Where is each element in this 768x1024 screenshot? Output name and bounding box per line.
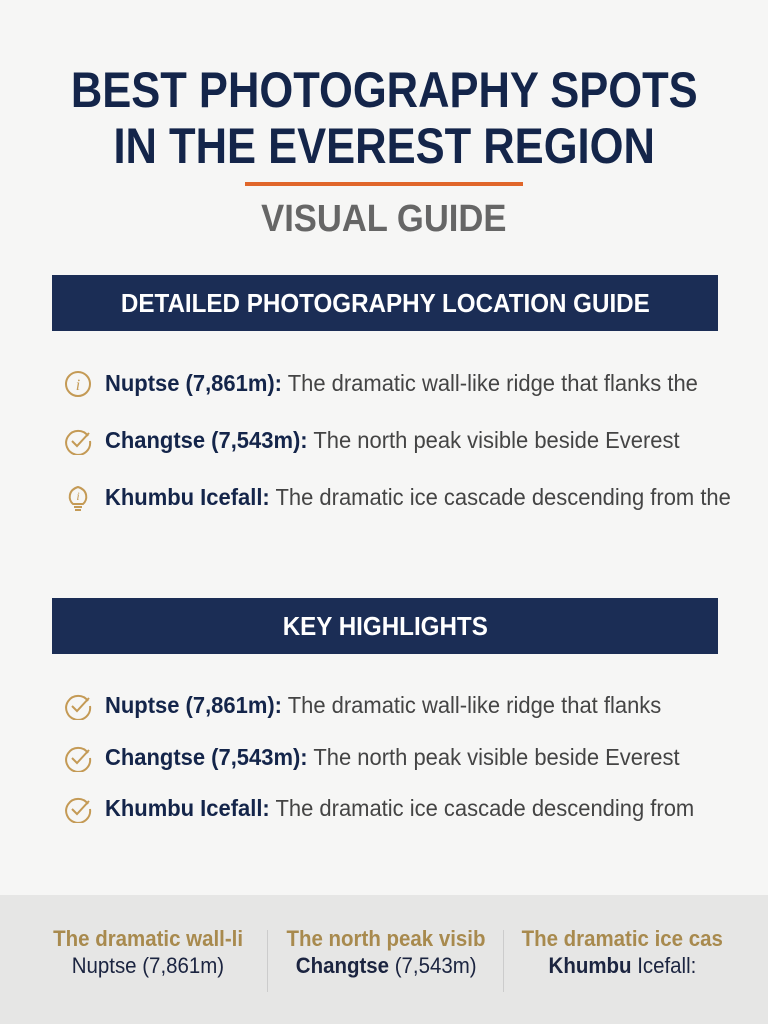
icon: bulb [68, 486, 88, 511]
footer col 1 [53, 926, 243, 978]
icon: check [65, 746, 92, 772]
icon: check [65, 430, 92, 455]
title [71, 62, 697, 174]
icon: info: i [76, 377, 80, 394]
item: changtse: Changtse (7,543m): The north peak visible beside Everest [105, 427, 680, 453]
item: nuptse: Nuptse (7,861m): The dramatic wall-like ridge that flanks the [105, 370, 698, 396]
footer col 3: Khumbu Icefall: [548, 953, 696, 978]
footer col 1: The dramatic wall-li [53, 926, 243, 951]
footer [0, 895, 768, 1024]
footer col 2: The north peak visib [287, 926, 485, 951]
footer col 3 [521, 926, 723, 978]
highlight: khumbu: Khumbu Icefall: The dramatic ice cascade descending from [105, 795, 694, 821]
icon: check [65, 798, 92, 823]
icon: bulb: i [76, 489, 80, 503]
icon: check [65, 694, 92, 720]
banner: detailed guide [52, 275, 718, 331]
highlight: nuptse: Nuptse (7,861m): The dramatic wall-like ridge that flanks [105, 692, 661, 718]
banner: key highlights [52, 598, 718, 654]
title: BEST PHOTOGRAPHY SPOTS [71, 62, 697, 118]
highlight: changtse: Changtse (7,543m): The north peak visible beside Everest [105, 744, 680, 770]
footer col 1: Nuptse (7,861m) [72, 953, 224, 978]
footer col 3: The dramatic ice cas [521, 926, 723, 951]
banner: detailed guide: DETAILED PHOTOGRAPHY LOCATION GUIDE [121, 288, 649, 318]
item: khumbu: Khumbu Icefall: The dramatic ice cascade descending from the [105, 484, 731, 510]
footer col 2 [286, 926, 485, 978]
footer col 2: Changtse (7,543m) [296, 953, 476, 978]
icon: info [65, 371, 91, 397]
title: IN THE EVEREST REGION [113, 118, 655, 174]
subtitle: VISUAL GUIDE [261, 198, 507, 240]
banner: key highlights: KEY HIGHLIGHTS [282, 611, 488, 641]
